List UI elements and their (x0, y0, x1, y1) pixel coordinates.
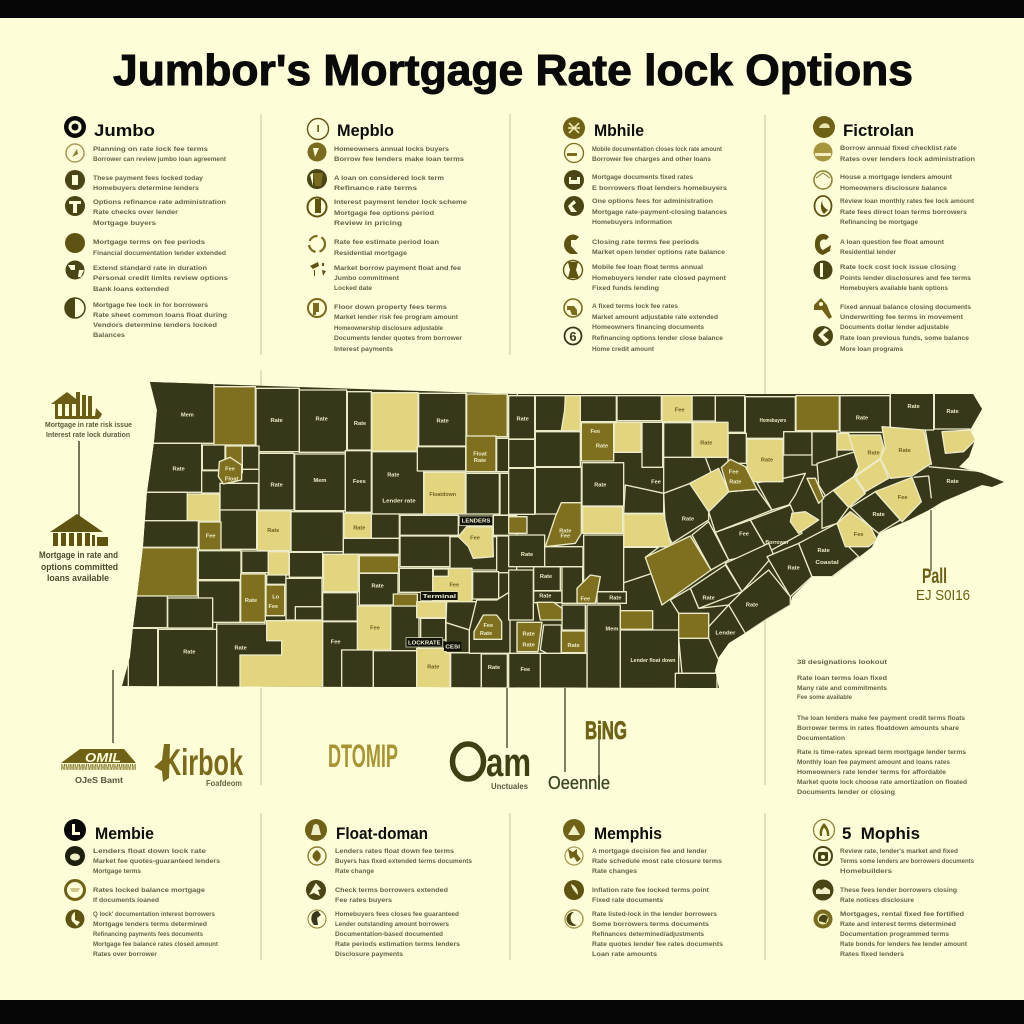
option text: Market lender risk fee program amount (334, 314, 459, 321)
option text: Rate periods estimation terms lenders (335, 941, 460, 948)
option text: Review loan monthly rates fee lock amount (840, 198, 975, 205)
option text: Homeownership disclosure adjustable (334, 325, 443, 332)
panel: Float-doman (305, 819, 472, 958)
option icons (812, 847, 834, 928)
icon: black badge (64, 819, 86, 841)
map of rate lock regions: Rate (788, 566, 800, 572)
logo: Oam: am (486, 741, 531, 785)
map of rate lock regions: Rate (517, 416, 529, 422)
pointer lines (113, 510, 931, 790)
option text (840, 145, 975, 353)
option text: Some borrowers terms documents (592, 921, 709, 928)
panel: 5 Mophis (812, 820, 974, 958)
map of rate lock regions: Rate (899, 448, 911, 454)
option icons (564, 847, 584, 928)
text block: right-hand notes: Market quote lock choose rate amortization on floated (797, 779, 967, 786)
text block: right-hand notes: 38 designations lookout (797, 659, 888, 666)
option text: Underwriting fee terms in movement (840, 314, 964, 321)
option text: A loan on considered lock term (334, 175, 444, 182)
map of rate lock regions: Coastal (815, 560, 839, 566)
map of rate lock regions: Lender float down (630, 658, 676, 664)
option text: Documentation-based documented (335, 931, 443, 938)
option text: Homebuyers available bank options (840, 285, 948, 292)
option text: Lenders float down lock rate (93, 848, 206, 855)
option text: Rate checks over lender (93, 209, 178, 216)
map: region labels: Rate (354, 421, 366, 427)
option text: Borrow fee lenders make loan terms (334, 156, 464, 163)
option text: Rate fees direct loan terms borrowers (840, 209, 967, 216)
logo: Kirbok: Foafdeom (206, 779, 242, 788)
option text: Rate changes (592, 868, 637, 875)
logo: Oeennle: Oeennle (548, 773, 610, 793)
map: region labels: Rate (353, 525, 365, 531)
map of rate lock regions: Rate (729, 480, 741, 486)
option text: Rate notices disclosure (840, 897, 914, 904)
map: region labels: Fee (206, 534, 216, 540)
text block: right-hand notes: Borrower terms in rates floatdown amounts share (797, 725, 959, 732)
map: region labels: Fee (225, 467, 235, 473)
option text: Residential lender (840, 249, 896, 256)
map: region labels: Fee (483, 623, 493, 629)
option text: Market open lender options rate balance (592, 249, 725, 256)
option text: Borrower fee charges and other loans (592, 156, 711, 163)
option text: Mobile documentation closes lock rate amount (592, 146, 723, 153)
map: region labels: Mem (181, 412, 194, 418)
map: region labels: Fees (353, 479, 366, 485)
map: region labels (173, 412, 500, 671)
logo: Oeennle (548, 717, 627, 793)
heading: Membie: Membie (95, 824, 154, 843)
text block: right-hand notes (797, 659, 967, 796)
option text (592, 146, 727, 353)
callout text: Mortgage in rate risk issue (45, 420, 132, 429)
icon: house with columns (50, 514, 108, 546)
map of rate lock regions: Rate (523, 642, 535, 648)
option text: Mortgages, rental fixed fee fortified (840, 911, 964, 918)
option text: Rate sheet common loans float during (93, 312, 227, 319)
icon: olive badge (563, 819, 585, 841)
map of rate lock regions: Rate (947, 409, 959, 415)
option text: Mobile fee loan float terms annual (592, 264, 703, 271)
map of rate lock regions: Fee (580, 596, 590, 602)
option text: Market borrow payment float and fee (334, 265, 461, 272)
option text: Documentation programmed terms (840, 931, 949, 938)
option text: Bank loans extended (93, 286, 169, 293)
map of rate lock regions: Rate (539, 594, 551, 600)
logo: Admil: MMMMMMMMMMMMMMMMM (61, 763, 136, 772)
option text: Mortgage fee balance rates closed amount (93, 941, 219, 948)
option text: Rate listed-lock in the lender borrowers (592, 911, 717, 918)
map: region labels: Rate (271, 418, 283, 424)
map of rate lock regions: Rate (818, 548, 830, 554)
option text: Refinancing payments fees documents (93, 931, 203, 938)
option text: Terms some lenders are borrowers documents (840, 858, 974, 865)
option text: A mortgage decision fee and lender (592, 848, 707, 855)
option text: If documents loaned (93, 897, 159, 904)
map: boxed labels: Terminal (423, 594, 457, 600)
option text: Interest payment lender lock scheme (334, 199, 467, 206)
icon: crest (563, 117, 585, 139)
map of rate lock regions: Rate (908, 404, 920, 410)
icon: olive badge (813, 116, 835, 138)
map of rate lock regions: Homebuyers (760, 418, 786, 424)
logo: Kirbok (154, 742, 243, 788)
option text: Personal credit limits review options (93, 275, 228, 282)
panel: Mbhile (563, 117, 727, 353)
logo: Admil: OMIL (85, 750, 121, 765)
option text: These fees lender borrowers closing (840, 887, 957, 894)
option text: Fixed rate documents (592, 897, 663, 904)
option icons (65, 846, 85, 928)
callout: Pall: EJ S0I16 (916, 587, 970, 604)
option text: Refinances determined/adjustments (592, 931, 704, 938)
map of rate lock regions: Rate (700, 440, 712, 446)
option text: Borrower can review jumbo loan agreement (93, 156, 227, 163)
option text: Lender outstanding amount borrowers (335, 921, 449, 928)
option text: Extend standard rate in duration (93, 265, 207, 272)
map: region labels: Lo (272, 595, 280, 601)
option text (840, 848, 974, 958)
option icons (306, 847, 326, 928)
option text: Financial documentation lender extended (93, 250, 226, 257)
option text: Rates fixed lenders (840, 951, 904, 958)
option text: One options fees for administration (592, 198, 713, 205)
map: region labels: Rate (183, 650, 195, 656)
icon: info ring (308, 118, 328, 140)
heading: 5 Mophis: 5 Mophis (842, 824, 920, 843)
map of rate lock regions: Rate (594, 482, 606, 488)
map: region labels: Rate (267, 528, 279, 534)
panel: Jumbo (64, 116, 228, 339)
map of rate lock regions: Fee (854, 532, 864, 538)
logo: Kirbok: Kirbok (163, 742, 243, 783)
option text (592, 848, 723, 958)
map of rate lock regions (122, 382, 1004, 688)
map: region labels: Fee (370, 625, 380, 631)
option text: Fixed funds lending (592, 285, 659, 292)
option text: Fee rates buyers (335, 897, 392, 904)
map: region labels: Mem (314, 478, 326, 484)
option text: Rate bonds for lenders fee lender amount (840, 941, 968, 948)
heading: Mepblo: Mepblo (337, 121, 394, 140)
map of rate lock regions: Mem (606, 626, 618, 632)
option text: Rate fee estimate period loan (334, 239, 439, 246)
option text (93, 848, 220, 958)
title: Jumbor's Mortgage Rate lock Options (113, 46, 913, 95)
option text: Mortgage lenders terms determined (93, 921, 207, 928)
option text: A fixed terms lock fee rates (592, 303, 678, 310)
option text: Homebuilders (840, 868, 892, 875)
option text: Review in pricing (334, 220, 402, 227)
map of rate lock regions: Borrower (765, 540, 789, 546)
option text: Home credit amount (592, 346, 655, 353)
option icons (65, 144, 85, 318)
map of rate lock regions: Fee (898, 495, 908, 501)
option text: Homeowners financing documents (592, 324, 704, 331)
panel: Mepblo (307, 118, 467, 353)
text block: right-hand notes: Rate loan terms loan fixed (797, 675, 887, 682)
logo: Dtomip: DTOMIP (328, 738, 398, 774)
option text: Borrow annual fixed checklist rate (840, 145, 957, 152)
option text: Check terms borrowers extended (335, 887, 448, 894)
option text: Buyers has fixed extended terms documents (335, 858, 472, 865)
text block: right-hand notes: Homeowners rate lender terms for affordable (797, 769, 946, 776)
option text: Refinance rate terms (334, 185, 417, 192)
option text: Mortgage fee lock in for borrowers (93, 302, 208, 309)
text block: right-hand notes: Fee some available (797, 694, 852, 701)
map: region labels: Rate (235, 645, 247, 651)
option text: Homebuyers lender rate closed payment (592, 275, 727, 282)
option text: Fixed annual balance closing documents (840, 304, 971, 311)
option icons (813, 142, 833, 346)
option text: E borrowers float lenders homebuyers (592, 185, 727, 192)
map: region labels: Rate (173, 466, 185, 472)
text block: right-hand notes: Rate is time-rates spread term mortgage lender terms (797, 749, 966, 756)
icon: target (64, 116, 86, 138)
callout: lower-left house (39, 514, 118, 583)
map of rate lock regions: Rate (682, 517, 694, 523)
map: western regions (128, 380, 518, 690)
panel: Fictrolan (813, 116, 975, 353)
heading: Float-doman: Float-doman (336, 824, 428, 843)
map of rate lock regions: Fee (675, 407, 685, 413)
option text: Closing rate terms fee periods (592, 239, 699, 246)
option text (335, 848, 472, 958)
option text (93, 146, 228, 339)
callout text: Interest rate lock duration (46, 430, 130, 439)
option text: Rates over lenders lock administration (840, 156, 975, 163)
option text: Mortgage fee options period (334, 210, 434, 217)
option text: Documents dollar lender adjustable (840, 324, 949, 331)
option text: Rate and interest terms determined (840, 921, 956, 928)
map: region labels: Rate (271, 483, 283, 489)
map: boxed labels (406, 516, 493, 651)
callout text: Mortgage in rate and (39, 550, 118, 560)
callout: Pall: Pall (922, 565, 947, 588)
option text: Vendors determine lenders locked (93, 322, 217, 329)
panel: Memphis (563, 819, 723, 958)
map of rate lock regions: Rate (523, 631, 535, 637)
option text: Inflation rate fee locked terms point (592, 887, 710, 894)
map of rate lock regions: Rate (873, 512, 885, 518)
map: region labels: Rate (387, 473, 399, 479)
map: region labels: Rate (316, 416, 328, 422)
map: region labels: Rate (437, 418, 449, 424)
map of rate lock regions: Rate (559, 528, 571, 534)
map: region labels: Rate (480, 631, 492, 637)
callout: Pall (916, 565, 970, 604)
map: region labels: Fee (470, 536, 480, 542)
option text: A loan question fee float amount (840, 239, 945, 246)
option text: Rates locked balance mortgage (93, 887, 205, 894)
map: region labels: Fee (331, 640, 341, 646)
map: region labels: Rate (245, 598, 257, 604)
option text: Refinancing be mortgage (840, 219, 918, 226)
option text: Rates over borrower (93, 951, 157, 958)
map of rate lock regions: Fee (590, 429, 600, 435)
option text: Market amount adjustable rate extended (592, 314, 718, 321)
option text: Mortgage rate-payment-closing balances (592, 209, 727, 216)
map: region labels: Fee (449, 582, 459, 588)
map: region labels: Float (225, 476, 239, 482)
logo: Oeennle: BiNG (585, 717, 627, 745)
option text: Q lock' documentation interest borrowers (93, 911, 215, 918)
option text (334, 146, 467, 353)
map of rate lock regions: Rate (540, 574, 552, 580)
map of rate lock regions: Rate (746, 603, 758, 609)
callout: top-left house chart (45, 392, 132, 439)
option text: Locked date (334, 285, 372, 292)
option text: Mortgage terms on fee periods (93, 239, 205, 246)
map of rate lock regions: Fee (520, 667, 530, 673)
callout text (45, 420, 132, 439)
option text: Lenders rates float down fee terms (335, 848, 454, 855)
map of rate lock regions: Rate (609, 595, 621, 601)
map of rate lock regions: Rate (568, 643, 580, 649)
option text: Rate change (335, 868, 374, 875)
option text: Rate quotes lender fee rates documents (592, 941, 723, 948)
option text: Mortgage buyers (93, 220, 156, 227)
icon: outlined badge (814, 820, 834, 840)
map of rate lock regions: Rate (761, 457, 773, 463)
map: boxed labels: LOCKRATE (408, 640, 441, 646)
map: region labels: Rate (427, 665, 439, 671)
map of rate lock regions: Fee (739, 531, 749, 537)
option text: Options refinance rate administration (93, 199, 226, 206)
logo: Oam (452, 741, 531, 791)
map: region labels: Float (473, 451, 487, 457)
map of rate lock regions: Rate (596, 444, 608, 450)
option text: More loan programs (840, 346, 903, 353)
map of rate lock regions: Rate (856, 416, 868, 422)
option text: Rate schedule most rate closure terms (592, 858, 722, 865)
text block: right-hand notes: Documentation (797, 735, 845, 742)
panel: Membie (64, 819, 220, 958)
option text: These payment fees locked today (93, 175, 203, 182)
option icons: 6 (569, 329, 577, 344)
map: region labels: Rate (372, 584, 384, 590)
map: region labels: Rate (474, 458, 486, 464)
option text: Homebuyers fees closes fee guaranteed (335, 911, 459, 918)
callout text (39, 550, 118, 583)
map of rate lock regions: Rate (521, 552, 533, 558)
icon: olive badge (305, 819, 327, 841)
option text: Review rate, lender's market and fixed (840, 848, 958, 855)
option text: Residential mortgage (334, 250, 407, 257)
option text: Homeowners annual locks buyers (334, 146, 449, 153)
heading: Memphis: Memphis (594, 824, 662, 843)
option text: Points lender disclosures and fee terms (840, 275, 971, 282)
option text: Rate loan previous funds, some balance (840, 335, 969, 342)
option text: Balances (93, 332, 125, 339)
text block: right-hand notes: Documents lender or closing (797, 789, 895, 796)
option text: Homebuyers determine lenders (93, 185, 199, 192)
map: region labels: Fee (268, 604, 278, 610)
map of rate lock regions: Rate (868, 450, 880, 456)
map: region labels: Lender rate (382, 498, 416, 504)
option text: House a mortgage lenders amount (840, 174, 953, 181)
map of rate lock regions: Lender (715, 630, 736, 636)
map: region labels: Rate (488, 665, 500, 671)
option text: Floor down property fees terms (334, 304, 447, 311)
logo: Oam: Unctuales (491, 782, 529, 791)
option text: Rate lock cost lock issue closing (840, 264, 956, 271)
callout text: loans available (47, 573, 109, 583)
option text: Homeowners disclosure balance (840, 185, 947, 192)
option text: Market fee quotes-guaranteed lenders (93, 858, 220, 865)
option icons (564, 144, 584, 344)
option text: Disclosure payments (335, 951, 403, 958)
text block: right-hand notes: The loan lenders make fee payment credit terms floats (797, 715, 965, 722)
logo: Admil (61, 749, 136, 785)
heading: Fictrolan: Fictrolan (843, 121, 914, 140)
map of rate lock regions: Fee (651, 479, 661, 485)
text block: right-hand notes: Monthly loan fee payment amount and loans rates (797, 759, 950, 766)
option icons (307, 142, 327, 317)
option text: Homebuyers information (592, 219, 672, 226)
option text: Mortgage terms (93, 868, 141, 875)
map of rate lock regions: Fee (560, 534, 570, 540)
option text: Refinancing options lender close balance (592, 335, 723, 342)
option text: Planning on rate lock fee terms (93, 146, 208, 153)
option text: Loan rate amounts (592, 951, 657, 958)
text block: right-hand notes: Many rate and commitments (797, 685, 887, 692)
icon: house with bars (51, 392, 102, 419)
callout text: options committed (41, 562, 118, 572)
logo: Admil: OJeS Bamt (75, 776, 123, 785)
heading: Jumbo: Jumbo (94, 121, 155, 140)
map: boxed labels: CESI (445, 644, 460, 650)
map of rate lock regions: Fee (729, 469, 739, 475)
heading: Mbhile: Mbhile (594, 121, 644, 140)
map: boxed labels: LENDERS (462, 519, 491, 525)
map: region labels: Floatdown (429, 492, 457, 498)
map of rate lock regions: Rate (703, 595, 715, 601)
option text: Jumbo commitment (334, 275, 400, 282)
option text: Documents lender quotes from borrower (334, 335, 462, 342)
option text: Interest payments (334, 346, 393, 353)
option text: Mortgage documents fixed rates (592, 174, 693, 181)
map: eastern regions (509, 393, 984, 690)
map of rate lock regions: Rate (947, 479, 959, 485)
